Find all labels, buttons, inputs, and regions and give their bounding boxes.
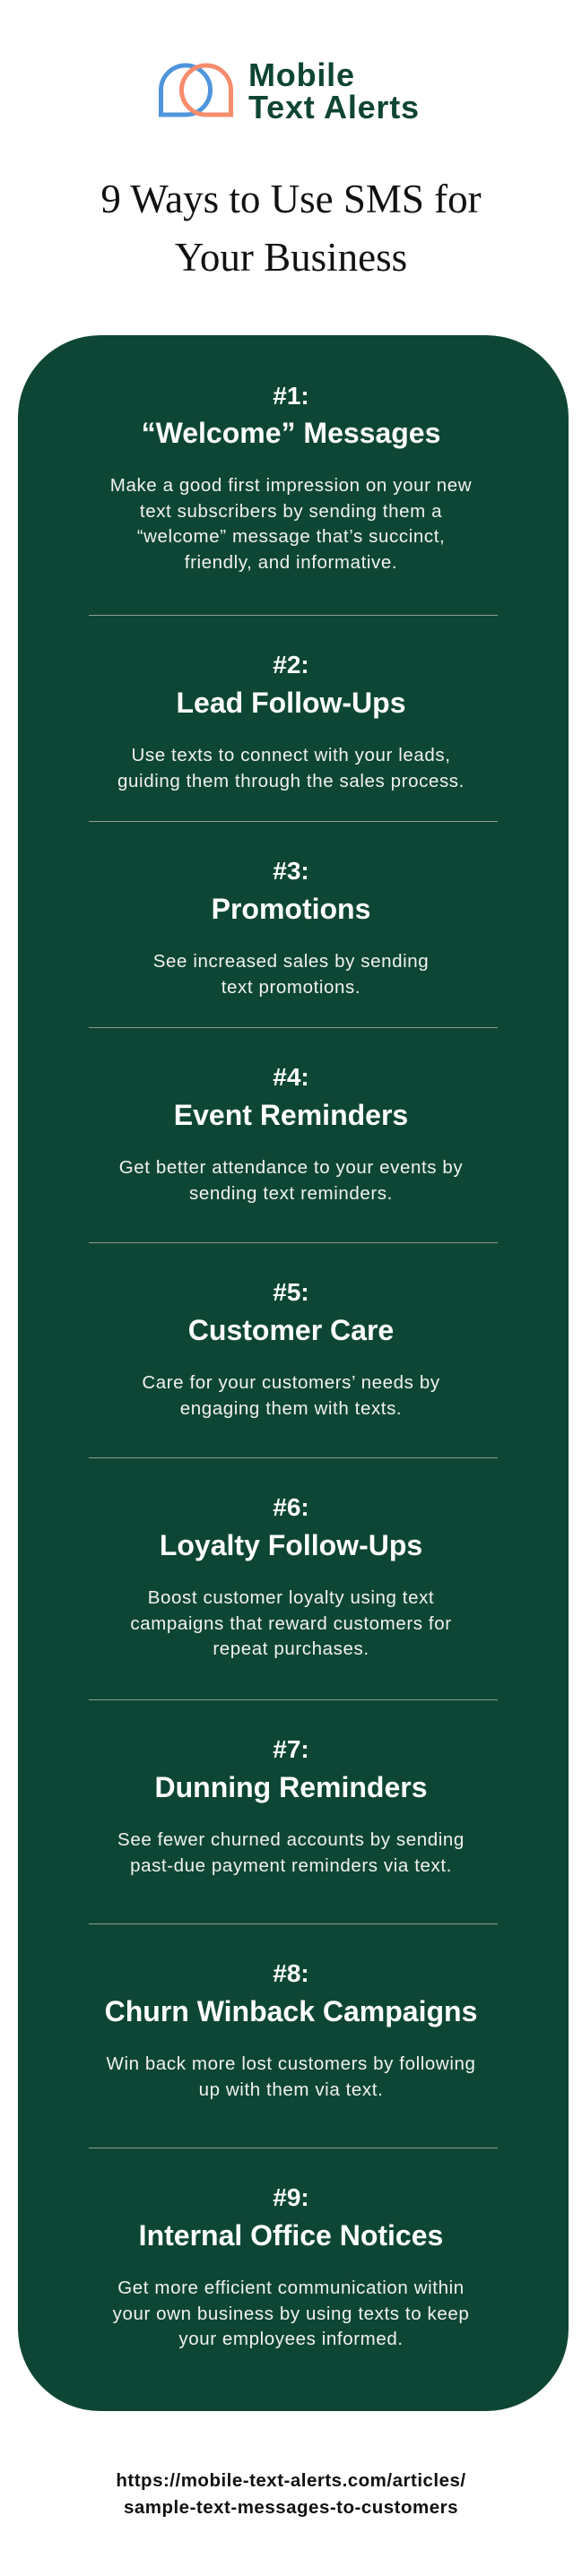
way 7: See fewer churned accounts by sending (117, 1829, 465, 1850)
source url: https://mobile-text-alerts.com/articles/ (116, 2470, 466, 2491)
way 1: friendly, and informative. (185, 552, 397, 573)
wordmark: Text Alerts (248, 89, 420, 125)
way 9: your employees informed. (178, 2329, 404, 2349)
way 6 (130, 1493, 452, 1659)
way 7: Dunning Reminders (154, 1771, 427, 1803)
way 2: #2: (273, 651, 309, 679)
way 8: Win back more lost customers by following (107, 2053, 475, 2074)
way 8: #8: (273, 1959, 309, 1987)
way 3: text promotions. (222, 977, 360, 998)
way 8: up with them via text. (199, 2079, 383, 2100)
way 4: Get better attendance to your events by (119, 1157, 463, 1178)
way 3: #3: (273, 857, 309, 885)
title: Your Business (175, 235, 407, 280)
way 7: #7: (273, 1735, 309, 1763)
way 4: #4: (273, 1063, 309, 1091)
source url: sample-text-messages-to-customers (124, 2497, 458, 2518)
icon: logo bubbles (159, 63, 233, 117)
way 2 (117, 651, 465, 791)
way 7: past-due payment reminders via text. (130, 1855, 452, 1876)
way 1: text subscribers by sending them a (140, 501, 442, 522)
way 3: See increased sales by sending (153, 951, 429, 972)
way 8 (105, 1959, 477, 2100)
way 1: “welcome” message that’s succinct, (137, 526, 445, 547)
way 1 (110, 382, 472, 573)
wordmark (248, 56, 420, 125)
way 6: repeat purchases. (213, 1638, 369, 1659)
way 5: Care for your customers’ needs by (142, 1372, 440, 1393)
title: 9 Ways to Use SMS for (100, 177, 482, 221)
way 3 (153, 857, 429, 998)
way 4: sending text reminders. (189, 1183, 393, 1204)
panel: ways list (18, 335, 569, 2411)
way 9: Internal Office Notices (139, 2219, 443, 2252)
way 1: “Welcome” Messages (142, 417, 440, 449)
way 1: #1: (273, 382, 309, 410)
source url (116, 2470, 466, 2518)
way 1: Make a good first impression on your new (110, 475, 472, 496)
way 6: campaigns that reward customers for (130, 1613, 452, 1634)
way 5: engaging them with texts. (180, 1398, 402, 1419)
way 2: guiding them through the sales process. (117, 771, 465, 791)
way 7 (117, 1735, 465, 1876)
way 9: your own business by using texts to keep (113, 2304, 469, 2324)
way 6: Loyalty Follow-Ups (160, 1529, 422, 1561)
title (100, 177, 482, 280)
way 5 (142, 1278, 440, 1419)
way 5: Customer Care (188, 1314, 394, 1346)
way 3: Promotions (212, 893, 370, 925)
way 6: #6: (273, 1493, 309, 1521)
way 2: Use texts to connect with your leads, (131, 745, 451, 765)
logo (159, 56, 420, 125)
wordmark: Mobile (248, 56, 355, 93)
way 6: Boost customer loyalty using text (148, 1587, 434, 1608)
way 8: Churn Winback Campaigns (105, 1995, 477, 2027)
way 2: Lead Follow-Ups (176, 687, 405, 719)
way 5: #5: (273, 1278, 309, 1306)
way 9: Get more efficient communication within (117, 2278, 465, 2298)
way 9 (113, 2183, 469, 2349)
way 4: Event Reminders (174, 1099, 408, 1131)
way 9: #9: (273, 2183, 309, 2211)
way 4 (119, 1063, 463, 1204)
